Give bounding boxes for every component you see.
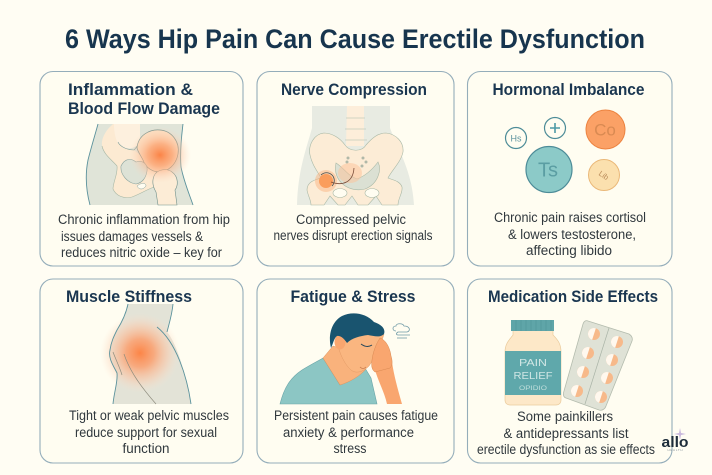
icon: Co cortisol: Co [594, 120, 616, 140]
icon: Ts testosterone [526, 146, 572, 192]
panel: fatigue and stress [257, 279, 454, 463]
body text: reduces nitric oxide – key for [61, 245, 222, 260]
logo: allo health [662, 428, 688, 452]
heading: nerve compression: Nerve Compression [281, 80, 427, 99]
body text: erectile dysfunction as sie effects [477, 442, 655, 457]
body text: Compressed pelvic [296, 212, 406, 227]
body text [274, 408, 438, 456]
hand [372, 338, 392, 372]
icon: Hs hormone: Hs [510, 134, 522, 144]
heading: inflammation: Blood Flow Damage [68, 99, 220, 118]
icon: stress cloud [393, 324, 410, 338]
title: 6 Ways Hip Pain Can Cause Erectile Dysfunction [65, 24, 645, 54]
heading: inflammation [68, 80, 220, 118]
heading: inflammation: Inflammation & [68, 80, 193, 99]
panel: nerve compression [257, 72, 454, 266]
ear [334, 334, 346, 350]
body text: stress [334, 441, 367, 456]
face [336, 327, 384, 372]
panel: medication side effects [468, 279, 672, 463]
body text: anxiety & performance [283, 425, 414, 440]
body text [494, 210, 646, 258]
shirt [280, 358, 377, 404]
icon: Hs hormone [506, 128, 526, 148]
heading: medication side effects: Medication Side Effects [488, 287, 658, 306]
panel: hormonal imbalance [468, 72, 672, 266]
forearm [373, 362, 402, 404]
body text: issues damages vessels & [61, 229, 203, 244]
body text: Chronic pain raises cortisol [494, 210, 646, 225]
illustration: tired man holding head [280, 313, 402, 404]
body text: Persistent pain causes fatigue [274, 408, 438, 423]
illustration: inflamed hip [86, 124, 193, 205]
illustration: pelvis with compressed nerve [297, 106, 414, 205]
body text: affecting libido [526, 243, 612, 258]
neck [323, 346, 366, 385]
illustration: pain relief bottle: PAIN [519, 357, 547, 369]
icon: low hormone pill: Lib [597, 169, 610, 182]
icon: plus hormone [544, 118, 566, 138]
body text [58, 212, 230, 260]
body text: Tight or weak pelvic muscles [69, 408, 229, 423]
panel: muscle stiffness [40, 279, 243, 463]
body text: & antidepressants list [504, 426, 629, 441]
logo: allo health: allo [662, 434, 688, 451]
illustration: pain relief bottle: OPIDIO [519, 385, 547, 392]
body text: nerves disrupt erection signals [274, 228, 433, 243]
illustration: pain relief bottle: RELIEF [514, 370, 552, 382]
panel: inflammation and blood flow damage [40, 72, 243, 266]
body text: Some painkillers [517, 409, 613, 424]
heading: muscle stiffness: Muscle Stiffness [66, 287, 192, 306]
illustration: pain relief bottle [505, 320, 561, 405]
body text [274, 212, 433, 243]
body text: Chronic inflammation from hip [58, 212, 230, 227]
body text: function [122, 441, 170, 456]
heading: fatigue and stress: Fatigue & Stress [290, 287, 416, 306]
icon: Ts testosterone: Ts [538, 160, 558, 182]
hair [330, 313, 384, 348]
body text: reduce support for sexual [75, 425, 217, 440]
body text [69, 408, 229, 456]
body text [477, 409, 655, 457]
heading: hormonal imbalance: Hormonal Imbalance [492, 80, 644, 99]
logo: allo health: HEALTH [668, 448, 682, 452]
illustration: inflamed hip muscle [100, 304, 191, 404]
icon: low hormone pill [588, 160, 620, 190]
illustration: blister pack of pills [563, 321, 632, 410]
icon: Co cortisol [586, 110, 625, 149]
body text: & lowers testosterone, [508, 227, 636, 242]
